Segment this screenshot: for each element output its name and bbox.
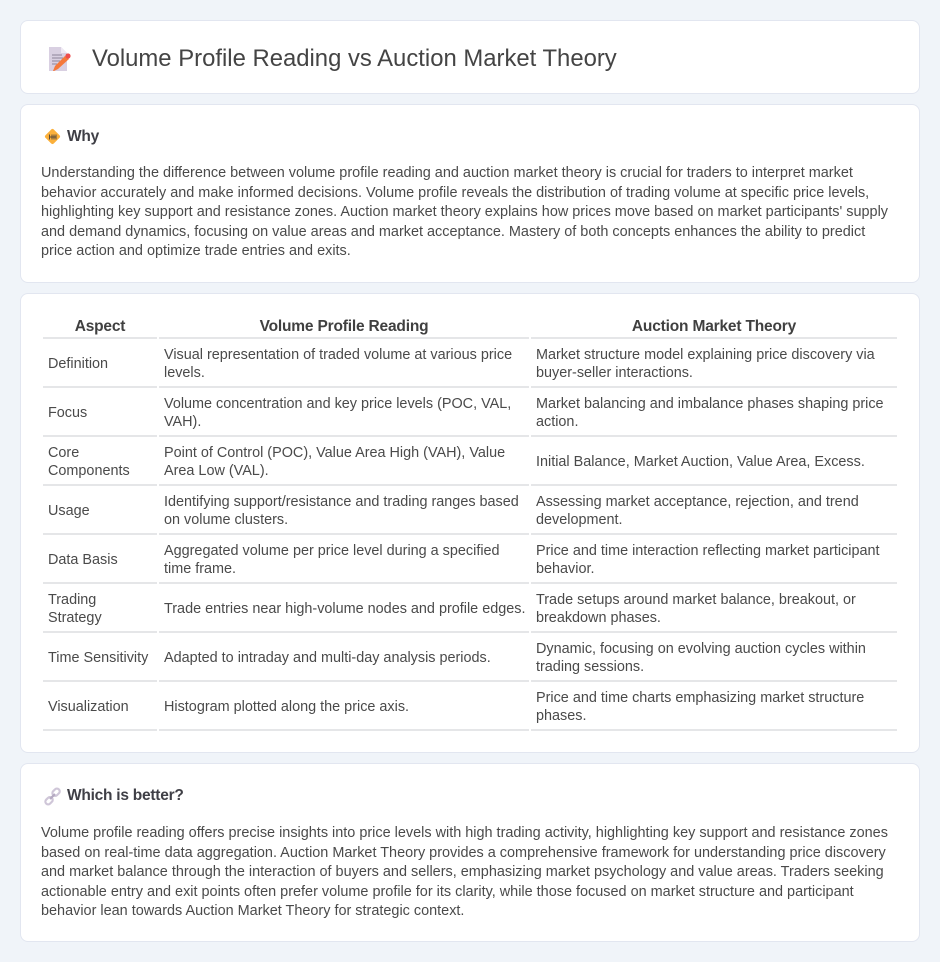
text block: which is better: based on real-time data aggregation. Auction Market Theory provides a comprehensive framework for understanding price discovery	[41, 845, 886, 861]
text block: which is better: Volume profile reading offers precise insights into price levels with high trading activity, highlighting key support and resistance zones	[41, 825, 888, 841]
row: focus: Volume concentration and key price levels (POC, VAL,	[164, 396, 511, 412]
heading: why: Why	[67, 128, 99, 145]
row: usage: development.	[536, 512, 622, 528]
row: time sensitivity	[48, 641, 866, 675]
row: focus: Market balancing and imbalance phases shaping price	[536, 396, 884, 412]
row: definition: Market structure model explaining price discovery via	[536, 347, 875, 363]
icon: diamond sign	[44, 128, 60, 144]
panel: why	[20, 104, 920, 283]
row: focus	[48, 396, 884, 430]
row: time sensitivity: Adapted to intraday and multi-day analysis periods.	[164, 650, 491, 666]
row: trading strategy: Trading	[48, 592, 96, 608]
row: trading strategy: Strategy	[48, 610, 102, 626]
text block: why: price action and optimize trade entries and exits.	[41, 243, 351, 259]
row: visualization: Price and time charts emphasizing market structure	[536, 690, 864, 706]
text block: why	[41, 165, 888, 259]
heading: page title: Volume Profile Reading vs Auction Market Theory	[92, 45, 617, 72]
row: usage: Assessing market acceptance, rejection, and trend	[536, 494, 859, 510]
row: visualization: Visualization	[48, 699, 129, 715]
text block: why: behavior accurately and make informed decisions. Volume profile reveals the distribution of trading volume at specific price levels,	[41, 185, 869, 201]
row: core components: Initial Balance, Market Auction, Value Area, Excess.	[536, 454, 865, 470]
row: trading strategy: Trade setups around market balance, breakout, or	[536, 592, 856, 608]
row: time sensitivity: Dynamic, focusing on evolving auction cycles within	[536, 641, 866, 657]
panel: which is better	[20, 763, 920, 942]
row: data basis	[48, 543, 880, 577]
row: core components: Point of Control (POC), Value Area High (VAH), Value	[164, 445, 505, 461]
table header: aspect: Aspect	[75, 318, 125, 335]
row: data basis: behavior.	[536, 561, 594, 577]
text block: why: Understanding the difference between volume profile reading and auction market theory is crucial for traders to interpret market	[41, 165, 853, 181]
row: usage: on volume clusters.	[164, 512, 288, 528]
table header: auction market theory: Auction Market Theory	[632, 318, 796, 335]
row: usage: Identifying support/resistance and trading ranges based	[164, 494, 519, 510]
row: focus: Focus	[48, 405, 87, 421]
panel: comparison table	[20, 293, 920, 753]
row: definition: Visual representation of traded volume at various price	[164, 347, 512, 363]
row: core components: Area Low (VAL).	[164, 463, 269, 479]
row: trading strategy	[48, 592, 856, 626]
row: data basis: time frame.	[164, 561, 236, 577]
row: trading strategy: breakdown phases.	[536, 610, 661, 626]
row: definition: levels.	[164, 365, 205, 381]
text block: which is better	[41, 825, 888, 919]
text block: why: highlighting key support and resistance zones. Auction market theory explains how prices move based on market participants' supply	[41, 204, 888, 220]
text block: why: and demand dynamics, focusing on value areas and market acceptance. Mastery of both concepts enhances the ability to predict	[41, 224, 865, 240]
row: time sensitivity: trading sessions.	[536, 659, 644, 675]
row: core components	[48, 445, 865, 479]
icon: document with pencil	[49, 47, 71, 71]
heading: which is better: Which is better?	[67, 787, 184, 804]
row: definition: Definition	[48, 356, 108, 372]
row: visualization	[48, 690, 864, 724]
row: definition	[48, 347, 875, 381]
row: trading strategy: Trade entries near high-volume nodes and profile edges.	[164, 601, 525, 617]
text block: which is better: and market balance through the interaction of buyers and sellers, emphasizing market psychology and value areas. Traders seeking	[41, 864, 884, 880]
row: usage: Usage	[48, 503, 90, 519]
row: data basis: Aggregated volume per price level during a specified	[164, 543, 500, 559]
row: visualization: Histogram plotted along the price axis.	[164, 699, 409, 715]
row: focus: action.	[536, 414, 578, 430]
row: data basis: Price and time interaction reflecting market participant	[536, 543, 880, 559]
row: core components: Components	[48, 463, 130, 479]
table header: volume profile reading: Volume Profile Reading	[260, 318, 428, 335]
text block: which is better: actionable entry and exit points often prefer volume profile for its clarity, while those focused on market structure and participant	[41, 884, 854, 900]
icon: chain link	[44, 788, 61, 806]
row: usage	[48, 494, 859, 528]
panel: title	[20, 20, 920, 94]
row: focus: VAH).	[164, 414, 201, 430]
row: data basis: Data Basis	[48, 552, 118, 568]
row: time sensitivity: Time Sensitivity	[48, 650, 148, 666]
text block: which is better: behavior lean towards Auction Market Theory for strategic context.	[41, 903, 464, 919]
row: core components: Core	[48, 445, 79, 461]
row: visualization: phases.	[536, 708, 586, 724]
row: definition: buyer-seller interactions.	[536, 365, 693, 381]
